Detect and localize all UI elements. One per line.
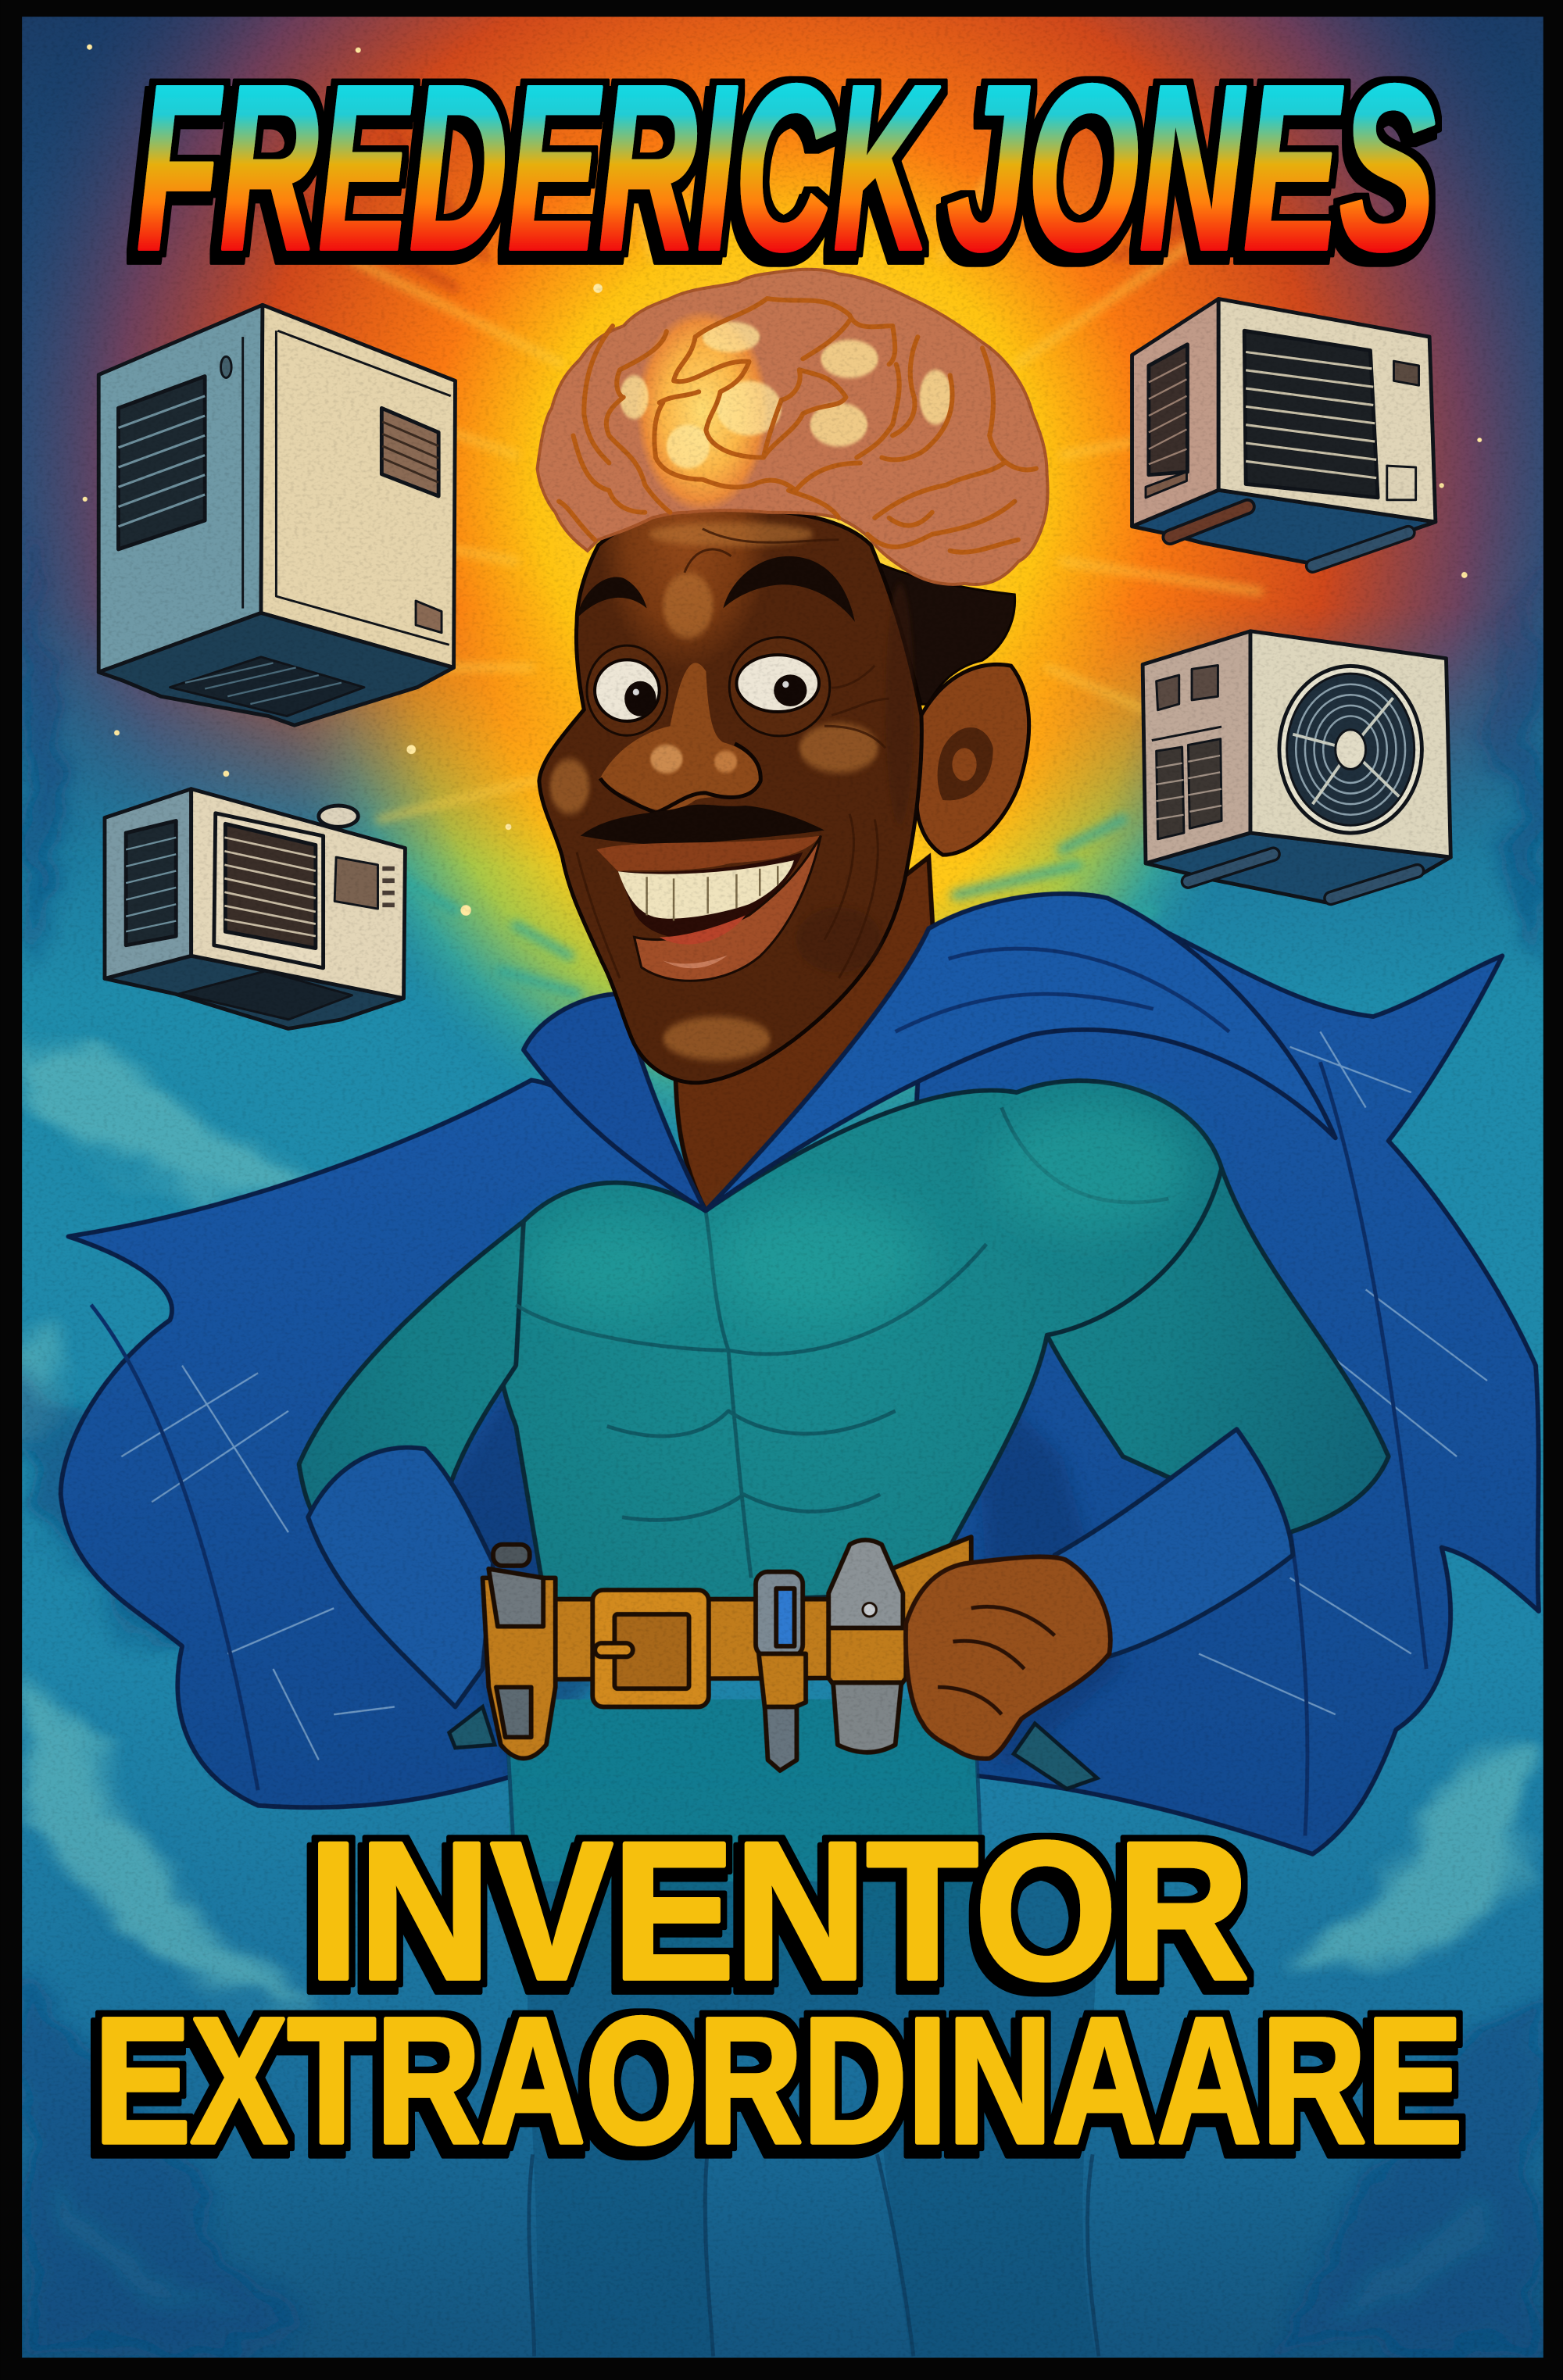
- hand on hip: [906, 1556, 1111, 1759]
- skin shadows: [796, 584, 914, 973]
- air conditioner: top left: [98, 305, 456, 725]
- gloves: [308, 1429, 1293, 1706]
- background: radiating glow behind head: [21, 16, 1545, 1168]
- face wrinkles: [577, 529, 889, 978]
- eyebrows: [577, 556, 855, 622]
- right cape: [910, 902, 1539, 1854]
- legs: [506, 1699, 1099, 2357]
- left arm: [299, 1221, 524, 1532]
- belt buckle: [592, 1590, 709, 1706]
- brain folds: [559, 298, 1036, 552]
- left cape: [61, 1081, 714, 1807]
- collar left: [524, 994, 706, 1211]
- skin highlights: [550, 522, 878, 1060]
- brackets: [1132, 490, 1436, 566]
- tool: canister: [828, 1540, 906, 1753]
- cape collar: [524, 894, 1336, 1211]
- nose: [600, 663, 760, 813]
- tool: left holster: [482, 1545, 556, 1758]
- air conditioner: top right: [1132, 299, 1436, 566]
- mustache: [581, 805, 824, 845]
- air conditioner: bottom left: [105, 789, 405, 1028]
- mouth interior: [618, 852, 803, 938]
- air conditioner: fan unit: [1143, 631, 1450, 902]
- lower lip: [635, 836, 821, 981]
- left tool handle: [449, 1706, 495, 1748]
- right glove: [1055, 1429, 1293, 1656]
- belt: [482, 1537, 971, 1771]
- head: [539, 509, 1029, 1083]
- torso: [299, 1081, 1389, 1608]
- chest and abdominal lines: [516, 1107, 1168, 1578]
- cape: back panels: [61, 902, 1539, 1854]
- brain highlights: [620, 322, 952, 469]
- right tool handle: [1014, 1724, 1097, 1789]
- pants: [506, 1699, 986, 2033]
- left glove: [308, 1448, 493, 1706]
- collar right: [706, 894, 1336, 1211]
- hair: [874, 562, 1015, 704]
- title: Frederick Jones: FREDERICK: [137, 36, 942, 298]
- right arm: [1047, 1168, 1389, 1532]
- mouth: [596, 836, 821, 981]
- tool: screwdriver: [756, 1572, 806, 1771]
- subtitle: Inventor: INVENTOR: [308, 1802, 1249, 2021]
- ear: [917, 664, 1029, 855]
- belt strap: [501, 1537, 971, 1680]
- left eye: [587, 645, 667, 735]
- face: [539, 509, 921, 1083]
- teeth: [618, 860, 794, 919]
- brain: [538, 270, 1048, 584]
- upper lip: [596, 836, 821, 871]
- right eye: [729, 638, 830, 736]
- neck: [675, 857, 936, 1211]
